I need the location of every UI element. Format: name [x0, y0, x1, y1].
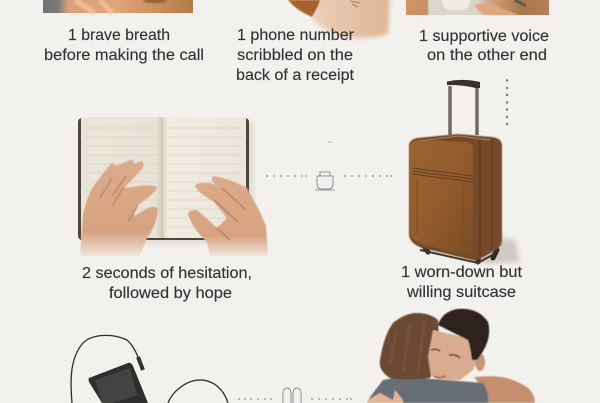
dotted connector with slippers icon — [238, 388, 352, 403]
caption: supportive voice — [419, 28, 549, 64]
hair — [380, 313, 440, 380]
left hand — [80, 160, 158, 256]
icon: bag — [315, 172, 335, 190]
dotted connector: vertical — [506, 79, 508, 125]
photo: open notebook with hands — [78, 117, 268, 256]
photo: music player — [88, 363, 148, 403]
caption: hesitation: 2 seconds of hesitation, — [82, 265, 252, 282]
caption: hesitation — [82, 265, 252, 302]
man hair — [438, 309, 489, 360]
panel: suitcase — [401, 80, 523, 301]
caption: supportive voice: 1 supportive voice — [419, 28, 549, 45]
wheels — [424, 246, 497, 262]
panel: phone number — [236, 0, 390, 84]
photo: hands around mug — [406, 0, 549, 15]
right hand — [188, 176, 268, 256]
shirt — [367, 377, 488, 403]
dotted connector with bag icon — [266, 142, 392, 190]
caption: suitcase: 1 worn-down but — [401, 264, 523, 281]
caption: phone number: back of a receipt — [236, 67, 355, 84]
caption: phone number: scribbled on the — [237, 47, 353, 64]
icon: slippers — [283, 388, 301, 403]
caption: suitcase: willing suitcase — [406, 284, 516, 301]
panel: hesitation — [78, 117, 268, 302]
caption: phone number: 1 phone number — [237, 27, 355, 44]
caption: brave breath: 1 brave breath — [68, 27, 170, 44]
face — [428, 330, 476, 380]
icon: cable — [71, 335, 228, 403]
photo: brown suitcase — [409, 80, 520, 264]
photo: hand holding receipt — [288, 0, 390, 38]
panel: supportive voice — [406, 0, 549, 64]
panel: embrace — [367, 309, 535, 403]
hand — [368, 390, 403, 403]
panel: music player — [71, 335, 228, 403]
caption: phone number — [236, 27, 355, 84]
panel: brave breath — [43, 0, 204, 64]
caption: suitcase — [401, 264, 523, 301]
body — [409, 134, 502, 261]
arm — [474, 376, 535, 403]
handle — [447, 80, 480, 135]
caption: brave breath: before making the call — [44, 47, 204, 64]
caption: brave breath — [44, 27, 204, 64]
photo: cropped hands on chest — [43, 0, 193, 13]
caption: hesitation: followed by hope — [109, 285, 232, 302]
caption: supportive voice: on the other end — [427, 47, 547, 64]
photo: two people hugging — [367, 309, 535, 403]
